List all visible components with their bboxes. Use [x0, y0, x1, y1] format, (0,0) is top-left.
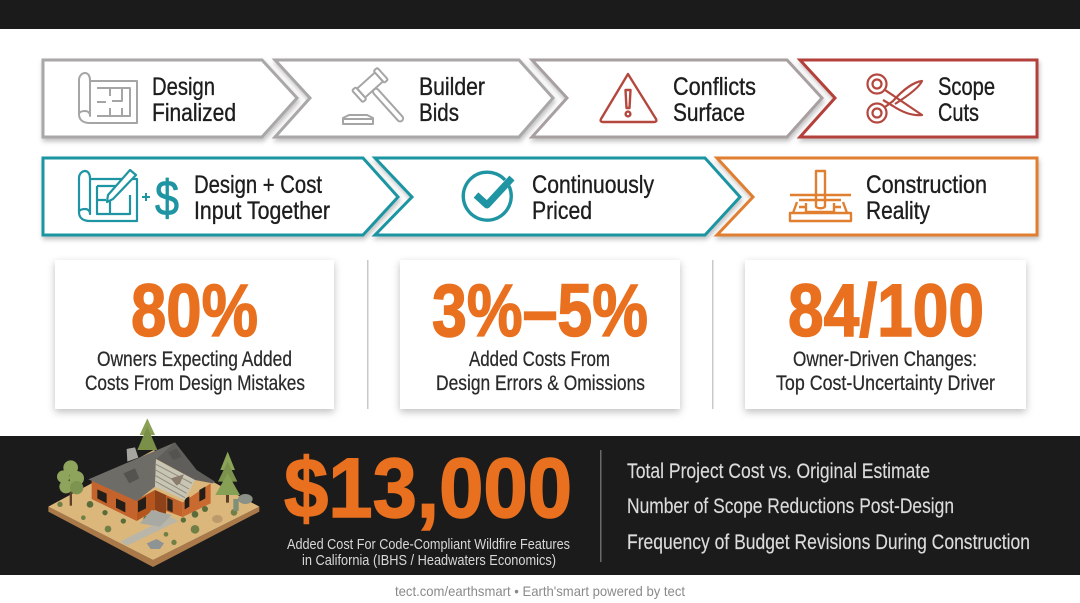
stat caption — [436, 348, 645, 395]
step: Scope Cuts — [800, 60, 1037, 137]
top bar — [0, 0, 1080, 29]
label — [152, 73, 236, 127]
stat card: 3%-5% — [400, 260, 680, 409]
footer: tect.com/earthsmart • Earth'smart powered by tect — [395, 583, 685, 599]
metrics list — [627, 460, 1030, 554]
stat value: 84/100 — [788, 269, 984, 352]
label: Scope — [938, 73, 995, 101]
icon: check circle — [463, 172, 512, 220]
label: Design + Cost — [194, 171, 322, 199]
icon: blueprint — [79, 73, 137, 123]
icon: warning triangle — [601, 74, 656, 122]
stat card: 80% — [55, 260, 334, 409]
stat caption: Top Cost-Uncertainty Driver — [776, 372, 995, 395]
icon: blueprint with pencil and dollar — [79, 170, 179, 226]
label — [419, 73, 485, 127]
label: Cuts — [938, 99, 979, 127]
label — [532, 171, 654, 225]
icon: foundation — [790, 171, 851, 221]
stat caption — [85, 348, 305, 395]
label: Design — [152, 73, 215, 101]
metrics list: Number of Scope Reductions Post-Design — [627, 495, 954, 518]
label: Finalized — [152, 99, 236, 127]
label: Priced — [532, 197, 592, 225]
step: Design Finalized — [43, 60, 297, 137]
label — [938, 73, 995, 127]
process row: traditional — [43, 60, 1037, 137]
step: Construction Reality — [717, 158, 1037, 235]
label: Construction — [866, 171, 987, 199]
metrics list: Total Project Cost vs. Original Estimate — [627, 460, 930, 483]
icon: gavel — [343, 68, 415, 132]
headline figure: $13,000 — [284, 441, 572, 535]
label — [194, 171, 330, 225]
stat value: 3%–5% — [432, 269, 648, 352]
stat value: 80% — [131, 269, 258, 352]
process row: integrated — [43, 158, 1037, 235]
label — [673, 73, 756, 127]
step: Design + Cost Input Together — [43, 158, 398, 235]
stat caption: Added Costs From — [469, 348, 610, 371]
label: Builder — [419, 73, 485, 101]
bottom band — [0, 436, 1080, 575]
label — [866, 171, 987, 225]
label: Conflicts — [673, 73, 756, 101]
label: Continuously — [532, 171, 654, 199]
step: Builder Bids — [275, 60, 553, 137]
icon: blueprint with pencil and dollar: $ — [155, 170, 179, 226]
stat caption: Design Errors & Omissions — [436, 372, 645, 395]
stat caption — [776, 348, 995, 395]
stat caption: Costs From Design Mistakes — [85, 372, 305, 395]
label: Reality — [866, 197, 930, 225]
headline caption: in California (IBHS / Headwaters Economics) — [302, 553, 556, 569]
label: Input Together — [194, 197, 330, 225]
stat card: 84/100 — [745, 260, 1026, 409]
stat caption: Owner-Driven Changes: — [793, 348, 977, 371]
icon: scissors — [868, 74, 922, 122]
illustration: house on isometric base — [48, 418, 259, 567]
label: Surface — [673, 99, 745, 127]
headline caption — [287, 537, 570, 569]
headline caption: Added Cost For Code-Compliant Wildfire Features — [287, 537, 570, 553]
label: Bids — [419, 99, 459, 127]
stat caption: Owners Expecting Added — [97, 348, 292, 371]
step: Conflicts Surface — [532, 60, 822, 137]
step: Continuously Priced — [375, 158, 740, 235]
